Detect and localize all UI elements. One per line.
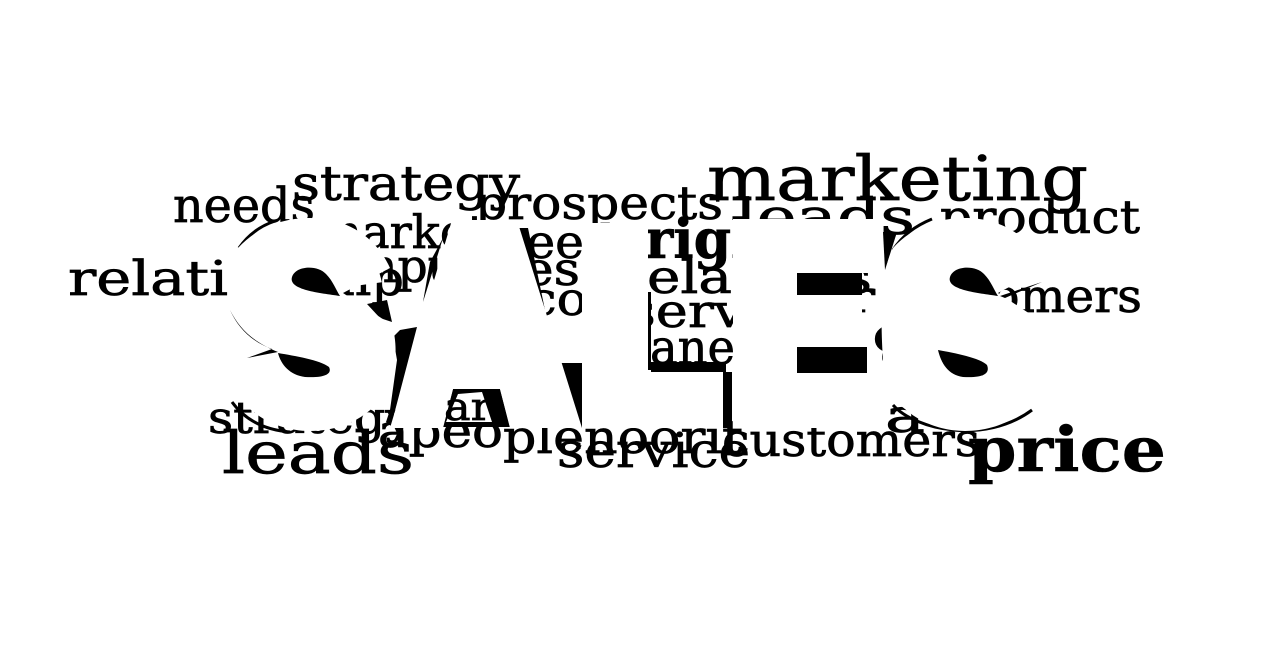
word cloud: leads: [222, 419, 414, 487]
word cloud: leads: [735, 188, 915, 246]
letter S, first: [227, 218, 396, 431]
word cloud: service: [628, 284, 824, 338]
word cloud: cost: [528, 272, 635, 326]
word cloud: r: [845, 272, 876, 323]
word cloud: sales: [450, 242, 580, 296]
black backing behind SALES: [367, 228, 933, 428]
title: SALES: SALES: [222, 183, 1049, 476]
word cloud: market: [318, 205, 487, 259]
word cloud: customers: [888, 269, 1142, 323]
thin crescents around the S letters: [232, 219, 1032, 432]
word cloud: relati: [68, 251, 228, 307]
word cloud: o: [872, 306, 912, 364]
letter shapes: A L E: [390, 219, 960, 428]
word cloud: relations: [620, 250, 872, 304]
word cloud: customers: [722, 413, 980, 467]
word cloud: needs: [495, 215, 640, 269]
word cloud: plenoorit: [503, 410, 744, 464]
word cloud: right: [645, 207, 795, 271]
word cloud: strategy: [208, 393, 413, 444]
word cloud: strategy: [292, 156, 520, 212]
word cloud: onship: [232, 251, 404, 307]
word cloud: o: [880, 331, 910, 377]
word cloud: prospects: [475, 176, 723, 230]
word cloud: input: [352, 239, 478, 293]
word cloud: apeo: [378, 404, 503, 458]
word cloud: needs: [173, 178, 315, 234]
word fragment: ar: ar: [444, 385, 493, 429]
letter S, last: [882, 218, 1051, 431]
word cloud: a: [885, 389, 925, 443]
word cloud: [68, 142, 1166, 487]
word cloud: marketing: [707, 142, 1088, 215]
word cloud: product: [940, 190, 1141, 244]
word cloud: service: [557, 423, 750, 479]
word cloud: ane: [650, 320, 735, 376]
word cloud: price: [968, 413, 1166, 486]
S counters and slits: [230, 268, 1042, 377]
